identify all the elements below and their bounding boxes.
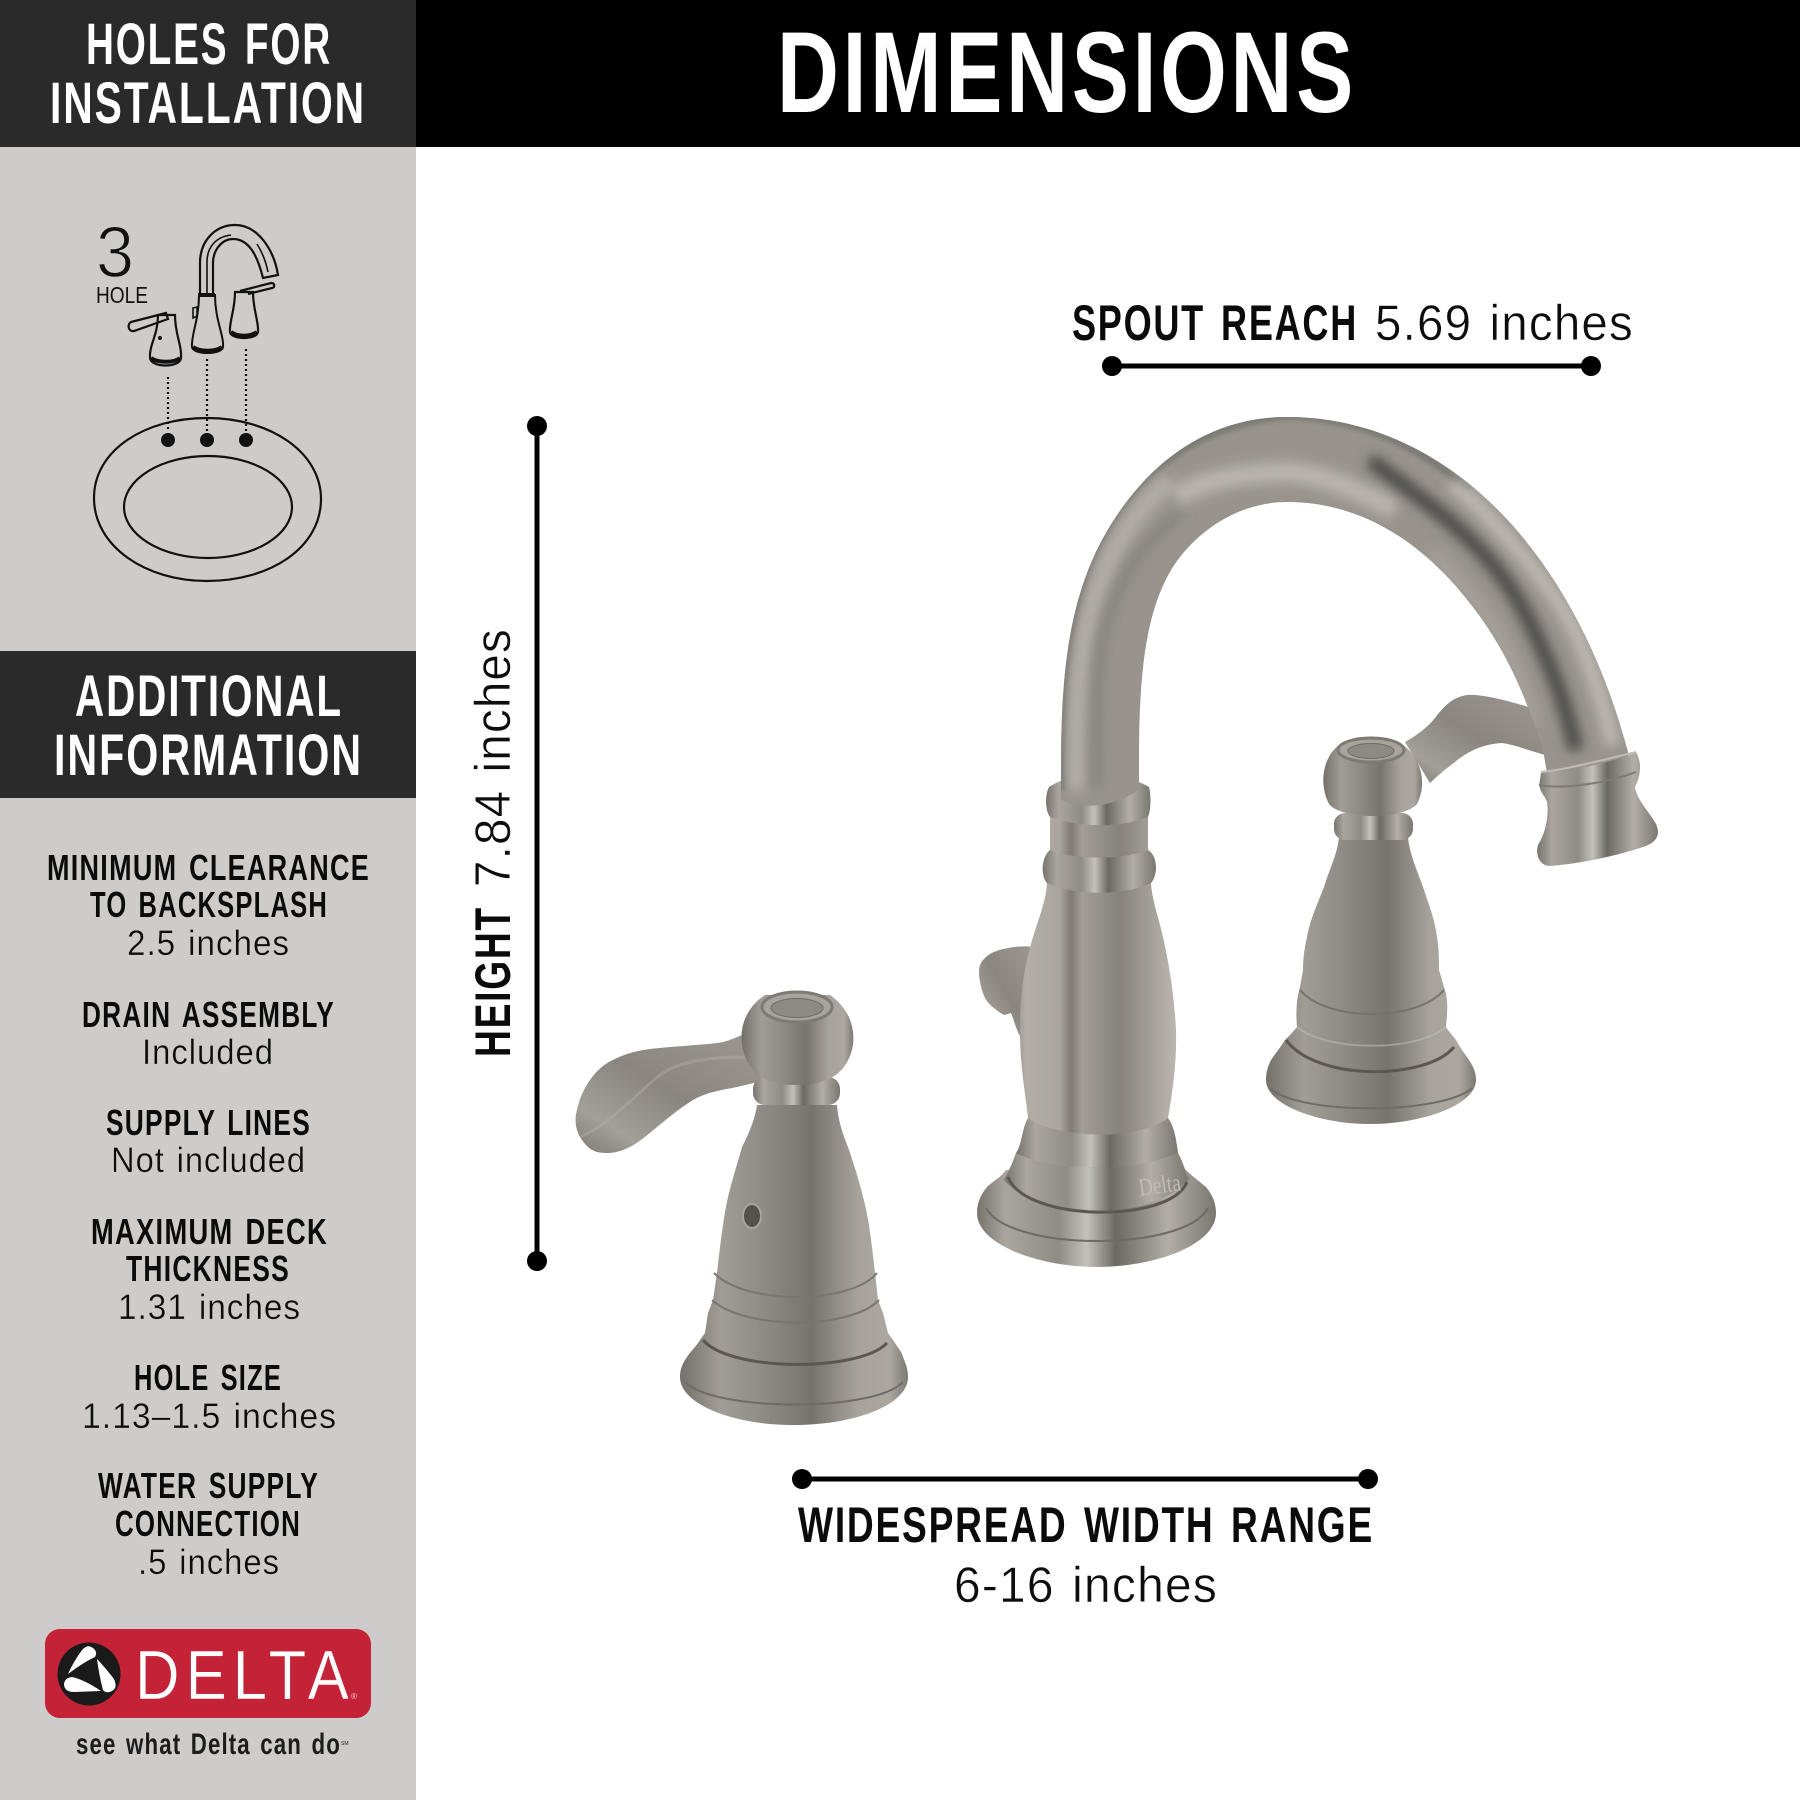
spout [1061, 415, 1632, 806]
widespread width range dimension: WIDESPREAD WIDTH RANGE [798, 1497, 1374, 1553]
panel: left sidebar [0, 0, 416, 1800]
title banner [416, 0, 1800, 147]
text block: water supply connection [98, 1465, 319, 1582]
widespread width range dimension [792, 1469, 1378, 1613]
3 hole label [96, 213, 148, 308]
text block: maximum deck thickness: THICKNESS [126, 1248, 290, 1289]
text block: drain assembly: DRAIN ASSEMBLY [82, 994, 335, 1035]
height dimension: HEIGHT [465, 906, 521, 1057]
text block: water supply connection: .5 inches [138, 1543, 280, 1582]
icon: mounting holes [161, 433, 253, 447]
heading: holes for installation [0, 0, 416, 147]
text block: minimum clearance: TO BACKSPLASH [90, 884, 328, 925]
center base [977, 1170, 1216, 1267]
text block: hole size: 1.13–1.5 inches [82, 1397, 337, 1436]
heading: additional information [0, 651, 416, 798]
center body [1004, 774, 1190, 1212]
heading: holes for installation: HOLES FOR [86, 12, 332, 77]
icon: three hole faucet over sink [94, 213, 321, 581]
logo: Delta: SM [341, 1741, 348, 1747]
logo: Delta: DELTA [135, 1636, 355, 1714]
left handle [576, 992, 908, 1425]
icon: line faucet [129, 225, 278, 366]
height dimension [465, 416, 547, 1271]
spout reach dimension: SPOUT REACH [1072, 295, 1358, 351]
3 hole label: HOLE [96, 282, 148, 308]
3 hole label: 3 [96, 213, 134, 293]
spout reach dimension [1072, 295, 1634, 376]
faucet photo illustration [576, 415, 1658, 1425]
text block: water supply connection: CONNECTION [115, 1503, 301, 1544]
text block: hole size [82, 1357, 337, 1436]
text block: minimum clearance: 2.5 inches [127, 924, 290, 963]
text block: water supply connection: WATER SUPPLY [98, 1465, 319, 1506]
text block: drain assembly [82, 994, 335, 1072]
height dimension: 7.84 inches [465, 628, 521, 887]
text block: supply lines: Not included [111, 1141, 306, 1180]
text block: maximum deck thickness: 1.31 inches [118, 1288, 301, 1327]
text block: minimum clearance: MINIMUM CLEARANCE [47, 847, 370, 888]
heading: additional information: INFORMATION [54, 723, 363, 788]
icon: dotted guide lines [168, 349, 246, 432]
heading: additional information: ADDITIONAL [75, 664, 343, 729]
text block: drain assembly: Included [142, 1033, 274, 1072]
text block: supply lines [106, 1102, 311, 1180]
spout reach dimension: 5.69 inches [1375, 295, 1634, 351]
title: DIMENSIONS [777, 9, 1357, 137]
aerator [1537, 752, 1658, 866]
logo: Delta: ® [351, 1692, 357, 1701]
text block: supply lines: SUPPLY LINES [106, 1102, 311, 1143]
right handle [1266, 695, 1549, 1124]
heading: holes for installation: INSTALLATION [50, 71, 366, 136]
pop-up drain lever [979, 946, 1034, 1040]
text block: minimum clearance [47, 847, 370, 963]
icon: sink basin [94, 418, 321, 581]
text block: maximum deck thickness: MAXIMUM DECK [91, 1211, 328, 1252]
logo: Delta [45, 1629, 371, 1761]
text block: maximum deck thickness [91, 1211, 328, 1327]
text block: hole size: HOLE SIZE [134, 1357, 282, 1398]
center body: Delta [1137, 1169, 1182, 1202]
widespread width range dimension: 6-16 inches [954, 1557, 1218, 1613]
logo: Delta: see what Delta can do [76, 1728, 341, 1761]
